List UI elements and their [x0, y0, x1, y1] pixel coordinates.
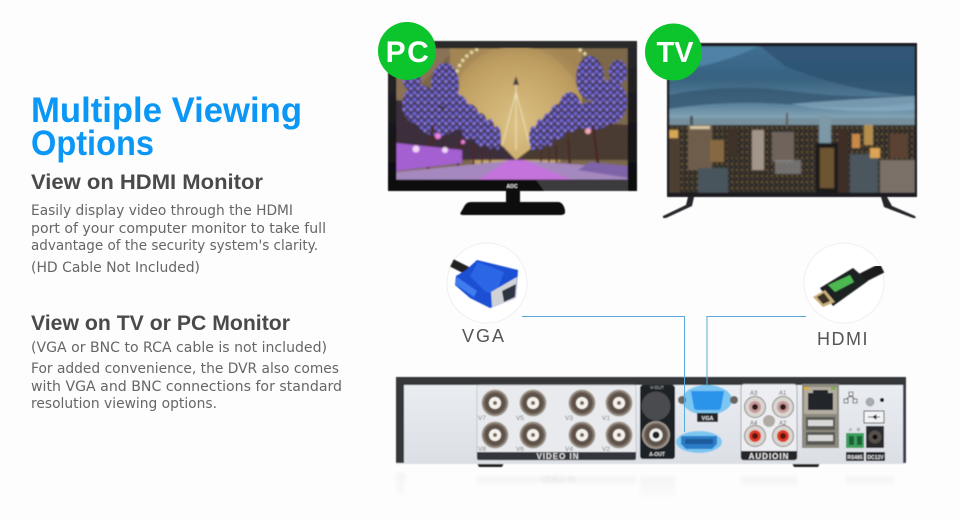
icon: VGA connector: [447, 243, 527, 323]
text block: HDMI description: [31, 203, 326, 276]
channel labels: [478, 415, 610, 453]
power polarity icon: [864, 411, 884, 423]
ground screw and reset: [866, 398, 884, 406]
TV: [663, 43, 917, 218]
audio in panel: A1: [779, 391, 787, 397]
PC screen image: [396, 46, 628, 180]
VIDEO IN label: VIDEO IN: [536, 452, 580, 461]
channel labels: V5: [516, 415, 524, 422]
channel labels: V4: [565, 446, 573, 453]
DVR feet: [477, 463, 820, 467]
city buildings: [669, 125, 915, 193]
audio in panel: A3: [750, 391, 758, 397]
video in panel: [477, 385, 636, 461]
DC12V power jack: [866, 426, 885, 461]
TV legs: [663, 197, 916, 218]
audio in panel: A4: [750, 421, 758, 427]
text block: TV or PC description: (VGA or BNC to RCA cable is not included): [31, 340, 327, 356]
text block: TV or PC description: resolution viewing options.: [31, 396, 217, 412]
DC12V power jack: DC12V: [867, 455, 884, 461]
title: Multiple Viewing: [31, 91, 302, 130]
VGA port: [678, 385, 738, 422]
connector line: VGA to port: [522, 316, 684, 432]
text block: HDMI description: (HD Cable Not Included): [31, 260, 200, 276]
RS485 terminal: [846, 427, 864, 461]
monitor stand: [460, 190, 565, 215]
badge: PC: [378, 22, 436, 80]
TV bezel: [667, 43, 917, 197]
TV screen image: [669, 46, 915, 193]
PC monitor: [388, 41, 637, 215]
AUDIO IN label: AUDIOIN: [749, 452, 789, 461]
text block: HDMI description: Easily display video through the HDMI: [31, 203, 293, 219]
label: VGA: VGA: [462, 326, 506, 346]
monitor brand: AOC: [506, 184, 518, 190]
badge: TV: TV: [656, 37, 694, 69]
video and audio out panel: V-OUT: [650, 385, 664, 390]
text block: HDMI description: port of your computer monitor to take full: [31, 221, 326, 237]
RS485 terminal: B: [857, 427, 860, 432]
channel labels: V2: [602, 446, 610, 453]
icon: HDMI connector: [804, 243, 884, 323]
video and audio out panel: [640, 385, 675, 459]
badge: PC: PC: [386, 36, 430, 69]
text block: TV or PC description: [31, 340, 342, 412]
channel labels: V3: [565, 415, 573, 422]
HDMI port: [676, 431, 722, 453]
trees with purple lights: [402, 56, 627, 150]
title: Options: [31, 124, 154, 163]
left text column: [31, 91, 342, 412]
VGA port: VGA: [702, 416, 713, 422]
title: [31, 91, 302, 163]
heading: view on TV or PC monitor: View on TV or PC Monitor: [31, 312, 290, 335]
badge: TV: [645, 24, 702, 80]
channel labels: V8: [478, 446, 486, 453]
channel labels: V6: [516, 446, 524, 453]
VIDEO IN label: [477, 452, 636, 461]
text block: HDMI description: advantage of the security system's clarity.: [31, 238, 318, 254]
monitor bezel: [388, 41, 637, 191]
video and audio out panel: A-OUT: [649, 452, 665, 458]
RS485 terminal: RS485: [847, 455, 863, 461]
channel labels: V1: [602, 415, 610, 422]
purple wall and path: [396, 143, 462, 171]
RCA jacks: [744, 396, 794, 446]
RS485 terminal: A: [849, 427, 852, 432]
tree trunks: [426, 124, 600, 170]
connector line: HDMI to port: [707, 316, 806, 386]
channel labels: V7: [478, 415, 486, 422]
network icon: [844, 392, 857, 403]
DVR reflection: [396, 473, 894, 498]
label: HDMI: HDMI: [817, 329, 869, 349]
DVR reflection: VIDEO IN: [540, 475, 576, 484]
text block: TV or PC description: For added convenience, the DVR also comes: [31, 361, 339, 377]
heading: view on HDMI monitor: View on HDMI Monitor: [31, 171, 263, 194]
DVR chassis: [396, 377, 906, 464]
audio in panel: [741, 384, 797, 461]
text block: TV or PC description: with VGA and BNC connections for standard: [31, 379, 342, 395]
DVR rear panel: [396, 377, 906, 467]
audio in panel: A2: [779, 421, 787, 427]
BNC connectors: [482, 390, 632, 448]
LAN and USB ports: [802, 384, 839, 448]
